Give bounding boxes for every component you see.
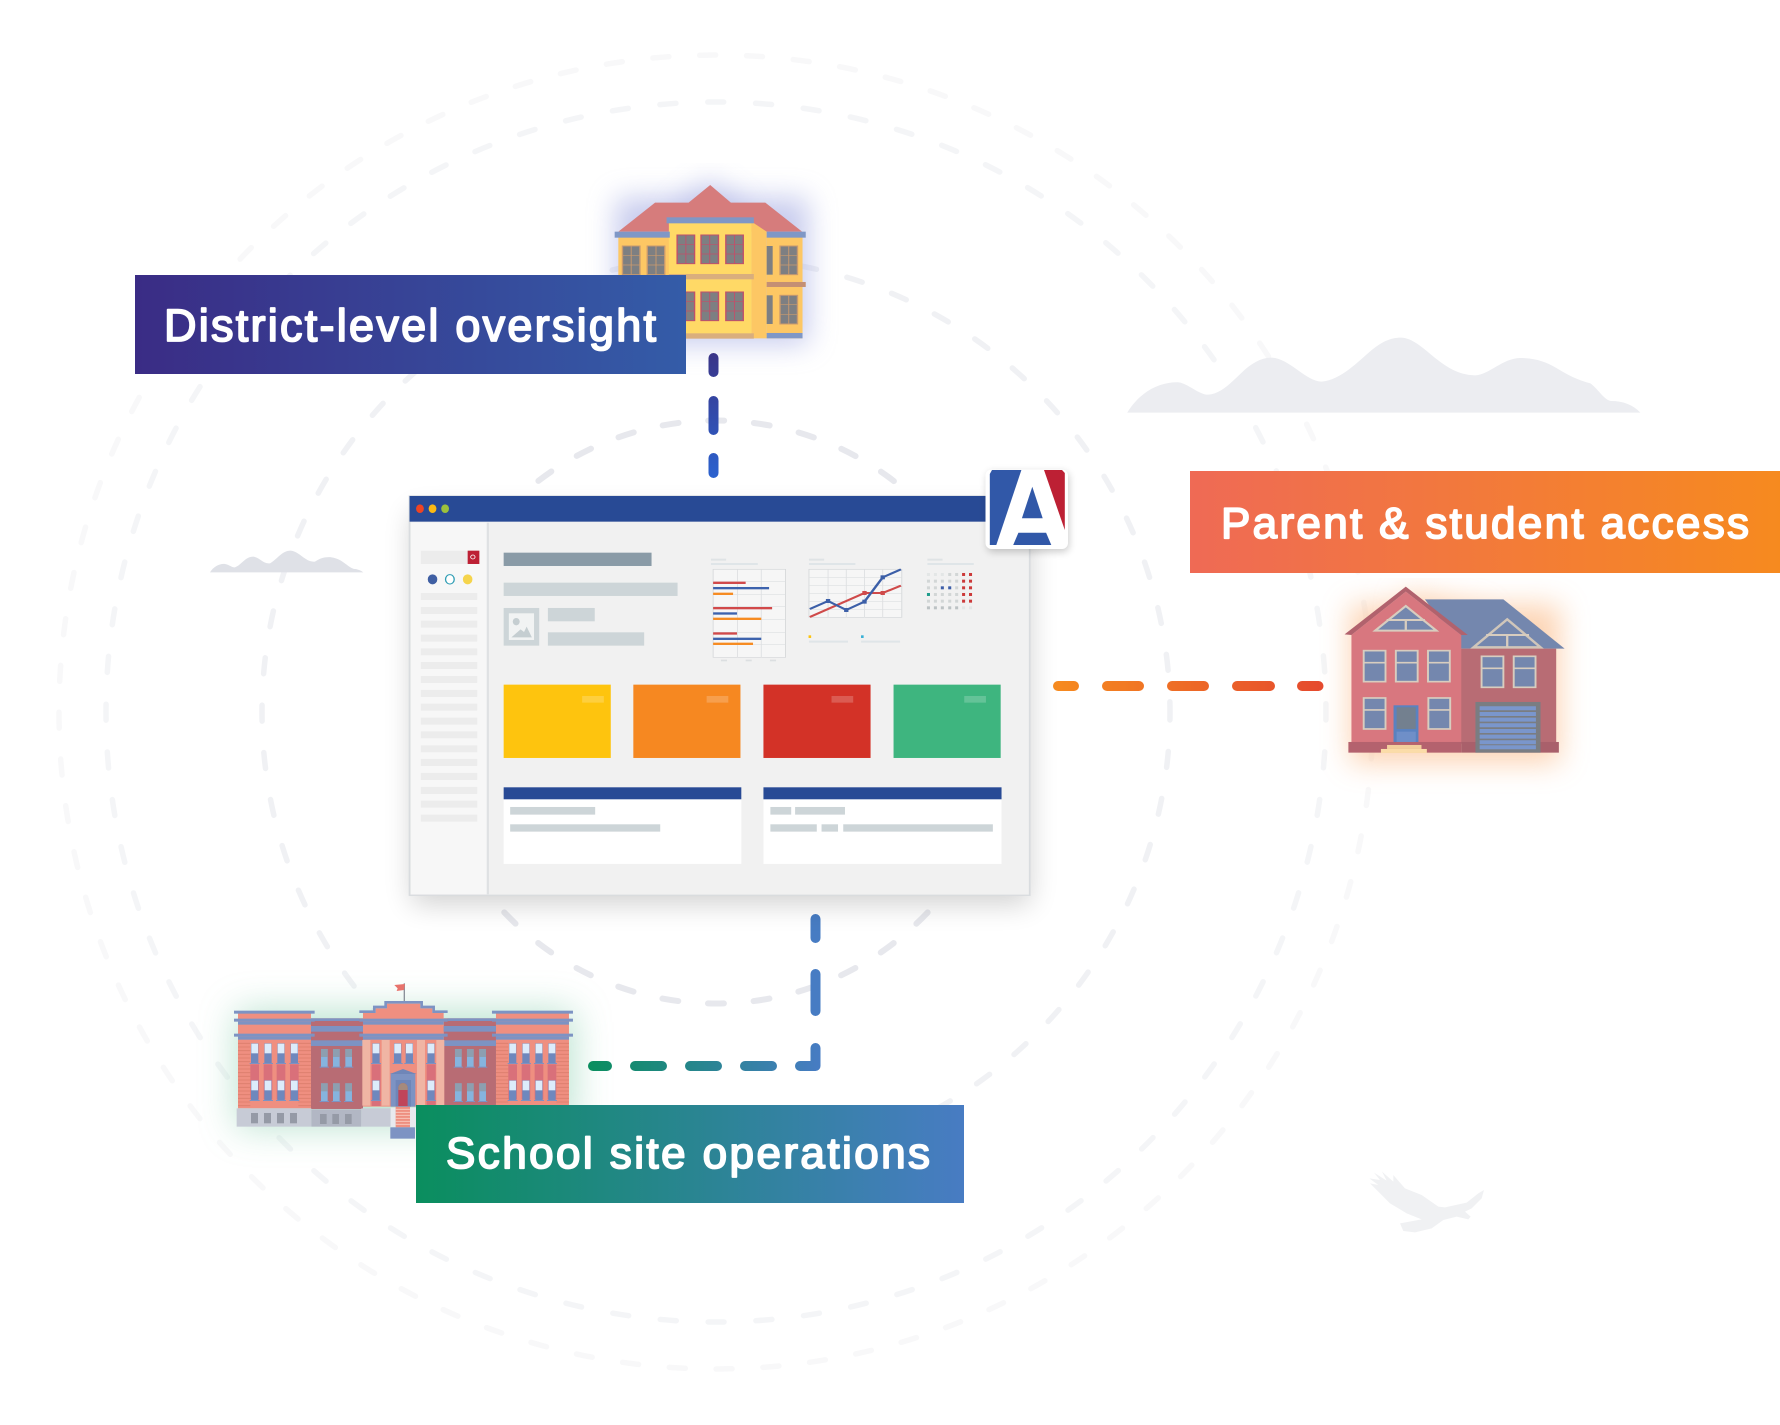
sidebar <box>411 523 489 894</box>
bar chart <box>711 559 786 661</box>
building: school site <box>234 983 574 1139</box>
table panel: left <box>504 787 741 864</box>
label: parent and student access: Parent & student access <box>1221 499 1749 548</box>
dot matrix chart <box>927 559 974 609</box>
table panel: right <box>763 787 1002 864</box>
background dashed rings <box>59 55 1373 1369</box>
label: parent and student access <box>1190 471 1780 573</box>
dashed connector: district to dashboard <box>708 358 718 473</box>
dashboard window <box>410 496 1030 895</box>
status cards <box>504 685 1001 758</box>
heading placeholders <box>504 553 678 646</box>
label: school site operations: School site operations <box>446 1129 930 1178</box>
building: district office (yellow) <box>615 178 808 344</box>
label: school site operations <box>416 1105 964 1203</box>
label: district-level oversight: District-level oversight <box>164 300 656 351</box>
label: district-level oversight <box>135 275 686 374</box>
large cloud <box>1127 338 1640 413</box>
window title bar <box>410 496 1030 522</box>
small cloud <box>210 551 363 572</box>
dashed connector: dashboard to school <box>593 919 816 1066</box>
bird silhouette <box>1369 1172 1484 1232</box>
brand logo tile <box>986 470 1069 552</box>
building: home (parent and student) <box>1345 587 1565 763</box>
line chart <box>809 559 902 643</box>
dashed connector: dashboard to home <box>1058 681 1318 691</box>
dashboard window shadow <box>412 512 1030 904</box>
